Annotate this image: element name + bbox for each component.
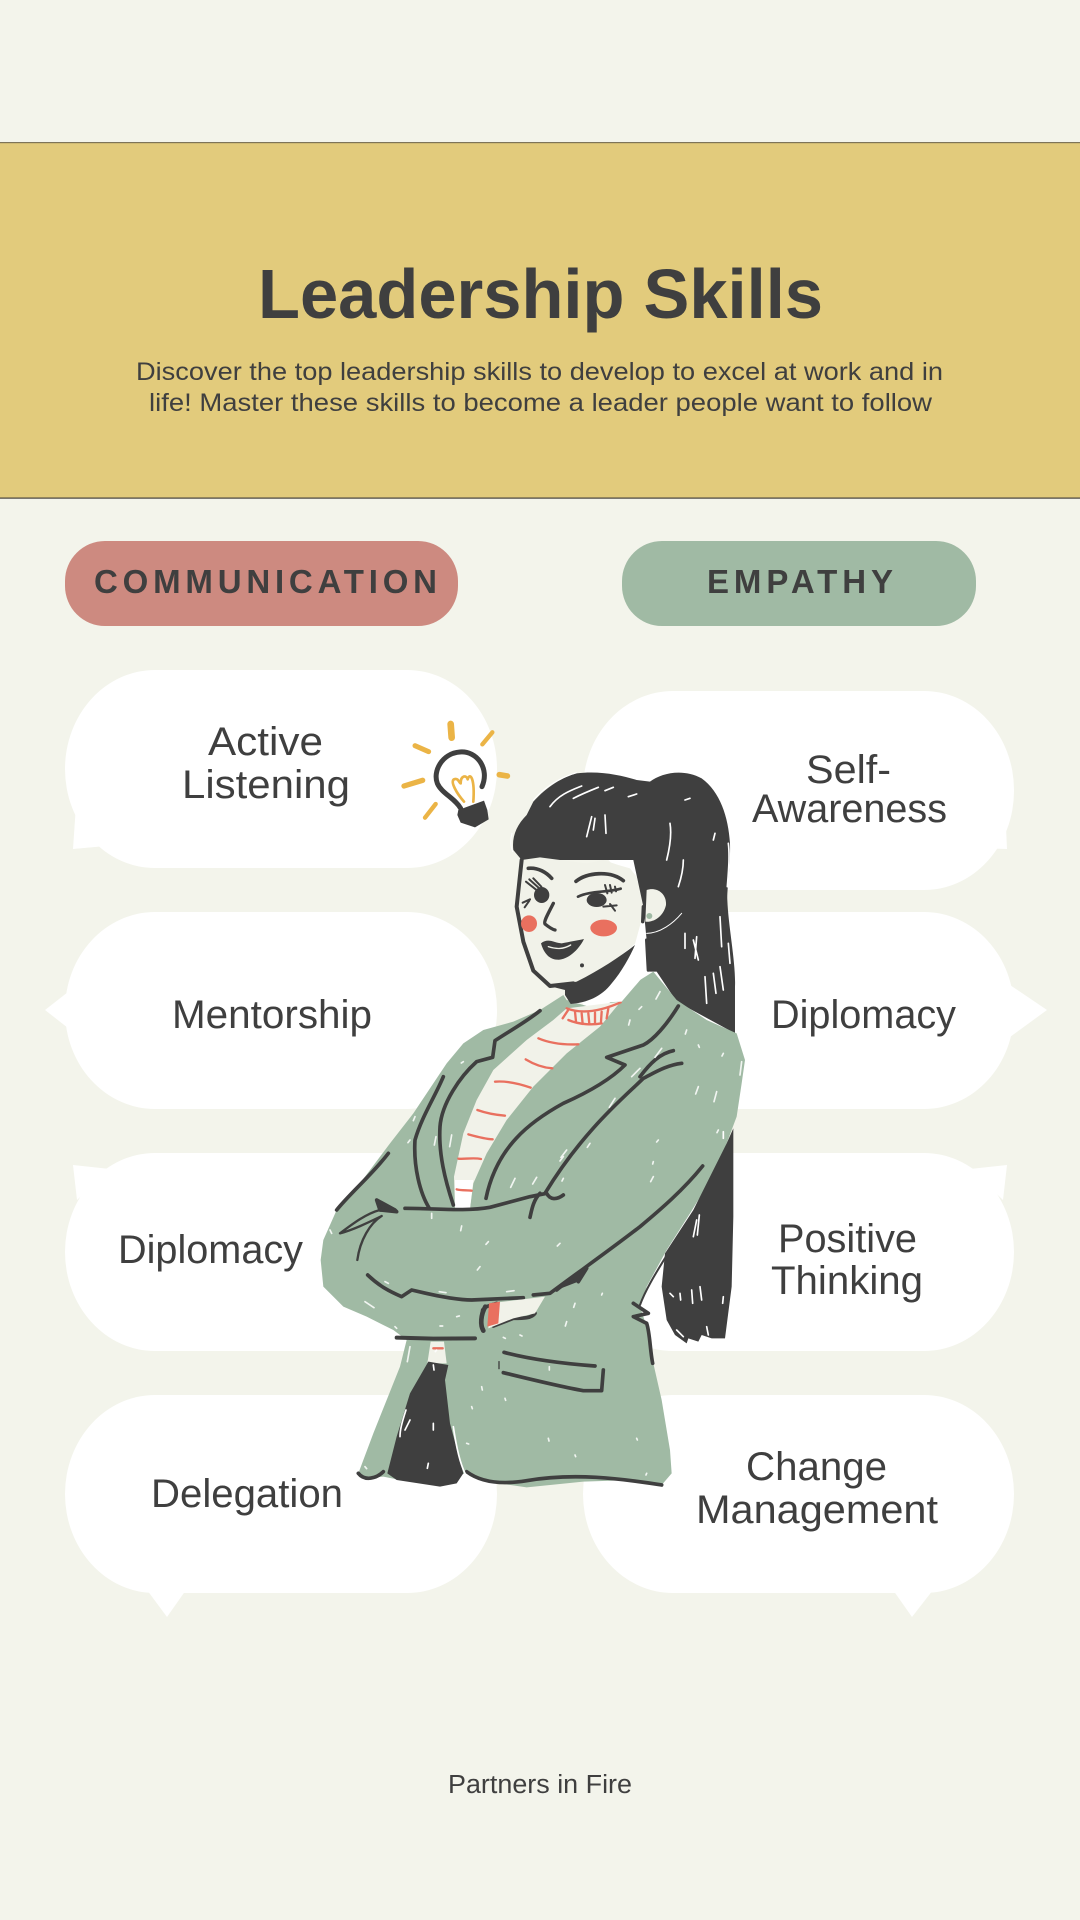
bubble: delegation [65, 1395, 497, 1617]
face [517, 857, 682, 1004]
title: Leadership Skills [258, 255, 823, 333]
cuff and red shirt sleeve [481, 1297, 545, 1331]
bubble: mentorship [45, 912, 497, 1109]
bubble: self-awareness: Self- [806, 748, 891, 792]
bubble: diplomacy right [583, 912, 1047, 1109]
lower ponytail [662, 1128, 733, 1343]
bubble: active listening: Active [208, 720, 323, 764]
bubble: active listening: Listening [182, 763, 350, 807]
hair and ponytail back [513, 773, 735, 1033]
category pill: communication: COMMUNICATION [94, 563, 437, 600]
illustration: woman with crossed arms [321, 724, 745, 1487]
subtitle: Discover the top leadership skills to develop to excel at work and in [136, 358, 943, 386]
category pill: communication [65, 541, 458, 626]
shirt [427, 1002, 621, 1363]
bubble: positive thinking [583, 1153, 1014, 1351]
bubble: positive thinking: Thinking [771, 1259, 923, 1303]
bubble: active listening [65, 670, 497, 868]
bubble: delegation: Delegation [151, 1472, 343, 1516]
bubble: self-awareness [583, 691, 1014, 890]
lips [541, 939, 584, 960]
category pill: empathy [622, 541, 976, 626]
bubble: change management: Management [696, 1488, 938, 1532]
white streaks [400, 773, 730, 1473]
bubble: mentorship: Mentorship [172, 993, 372, 1037]
bubble: diplomacy right: Diplomacy [771, 993, 956, 1037]
bubble: diplomacy left [65, 1153, 497, 1351]
jacket flecks [330, 992, 742, 1475]
footer credit: Partners in Fire [448, 1771, 632, 1799]
bubble: change management [583, 1395, 1014, 1617]
bubble: self-awareness: Awareness [752, 787, 947, 831]
bubble: positive thinking: Positive [778, 1217, 917, 1261]
subtitle: life! Master these skills to become a leader people want to follow [149, 389, 933, 417]
jacket lines [337, 1006, 703, 1391]
hair inner panel [387, 1362, 463, 1487]
subtitle [136, 358, 943, 417]
bubble: change management: Change [746, 1445, 887, 1489]
nose [545, 903, 555, 930]
header band [0, 142, 1080, 499]
jacket [321, 972, 745, 1487]
bubble: diplomacy left: Diplomacy [118, 1228, 303, 1272]
category pill: empathy: EMPATHY [707, 563, 893, 600]
eyes and brows [523, 868, 623, 967]
icon: light bulb [404, 724, 507, 827]
blush [521, 915, 537, 932]
